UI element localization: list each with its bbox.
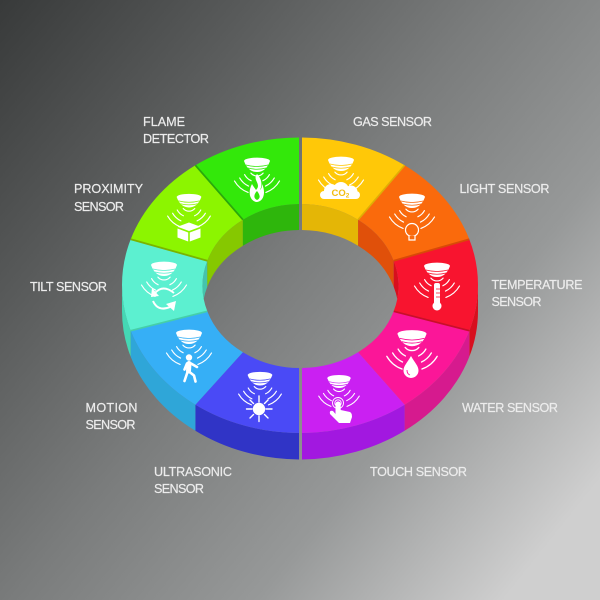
icon: touch sensor with hand [319,375,359,423]
proximity inner wall [207,220,243,287]
icon: gas sensor with CO2 cloud: CO [332,188,346,199]
segment: touch sensor [302,352,405,460]
icon: gas sensor with CO2 cloud [318,157,364,200]
proximity top face [131,165,243,261]
segment: tilt sensor [122,239,207,357]
label: flame detector: DETECTOR [143,132,209,146]
tilt outer side [122,285,131,357]
segment: proximity sensor [131,165,243,287]
icon: gas sensor with CO2 cloud: 2 [346,192,350,200]
flame inner wall [243,204,299,246]
segment: ultrasonic sensor [195,352,299,460]
touch top face [302,352,405,433]
label: light sensor: LIGHT SENSOR [460,182,550,196]
light inner wall [358,220,394,287]
icon: proximity sensor with cube [168,194,210,242]
water top face [358,311,469,405]
temperature top face [394,239,478,331]
label: touch sensor: TOUCH SENSOR [370,465,467,479]
gas top face [302,138,405,220]
water divider [394,311,469,331]
tilt divider [131,311,207,331]
icon: ultrasonic sensor with sun [239,372,281,422]
label: motion sensor: SENSOR [86,418,136,432]
segment: water sensor [358,311,469,431]
water outer side [405,331,469,431]
label: gas sensor: GAS SENSOR [353,115,432,129]
segmented sensor ring [122,138,478,460]
label: motion sensor: MOTION [86,401,138,415]
icon: water sensor with drop [387,330,437,378]
label: temperature sensor: TEMPERATURE [492,278,582,292]
motion outer side [131,331,195,431]
temperature inner wall [394,261,399,299]
icon: temperature sensor with thermometer [414,263,460,310]
sensor labels [30,115,582,496]
ultrasonic outer side [195,405,299,460]
gas inner wall [302,204,358,246]
label: proximity sensor: SENSOR [74,200,124,214]
label: proximity sensor: PROXIMITY [74,182,144,196]
icon: flame detector with flame [234,158,280,202]
label: water sensor: WATER SENSOR [462,401,558,415]
icon: tilt sensor with rotating arrows [142,262,186,311]
segment: motion sensor [131,311,243,431]
label: ultrasonic sensor: ULTRASONIC [154,465,232,479]
flame top face [195,138,299,220]
label: flame detector: FLAME [143,115,185,129]
label: temperature sensor: SENSOR [492,295,542,309]
icon: motion sensor with person [166,330,212,382]
segment: temperature sensor [394,239,478,357]
segment: flame detector [195,138,299,246]
temperature outer side [469,285,478,357]
flame divider [195,165,243,220]
light divider [358,165,405,220]
temperature divider [394,239,469,261]
segment: light sensor [358,165,469,287]
segment: gas sensor [302,138,405,246]
icon: light sensor with bulb [390,194,434,240]
light top face [358,165,469,261]
touch outer side [302,405,405,460]
tilt inner wall [202,261,207,299]
motion top face [131,311,243,405]
tilt top face [122,239,207,331]
ultrasonic top face [195,352,299,433]
proximity divider [131,239,207,261]
label: ultrasonic sensor: SENSOR [154,482,204,496]
label: tilt sensor: TILT SENSOR [30,280,107,294]
